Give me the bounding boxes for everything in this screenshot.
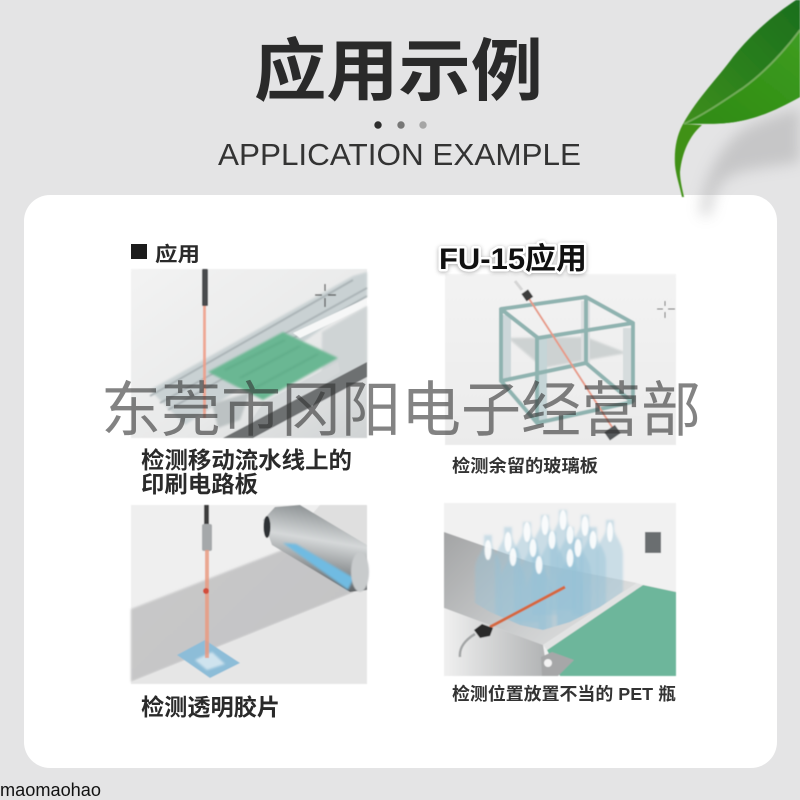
bottle highlights (484, 510, 613, 574)
sensor cable (460, 634, 475, 657)
caption: 检测移动流水线上的 (141, 447, 352, 473)
footer username: maomaohao (0, 780, 101, 800)
title: 应用示例 (254, 34, 543, 110)
heading: FU-15应用: FU-15应用 (439, 243, 587, 276)
caption: 检测透明胶片 (141, 694, 280, 720)
illustration: glass frame box (445, 274, 676, 445)
transparent film sheet (177, 640, 240, 678)
white content card (24, 195, 777, 768)
icon: green leaf (675, 0, 800, 197)
caption: 印刷电路板 (141, 471, 258, 497)
illustration: bottles on conveyor (444, 503, 676, 676)
bottles (475, 509, 624, 630)
crosshair cursor (315, 284, 336, 307)
leaf shadow (700, 108, 800, 215)
sensor receiver (604, 425, 621, 441)
sensor probe (202, 269, 208, 306)
sensor (474, 624, 493, 638)
decorative three dots (374, 121, 427, 129)
wall switch box (645, 532, 661, 553)
crosshair cursor (657, 301, 675, 318)
watermark: 东莞市冈阳电子经营部 (101, 377, 701, 444)
panel: misplaced PET bottle inspection (444, 503, 676, 704)
caption: 检测余留的玻璃板 (452, 456, 599, 476)
illustration: film on web (131, 505, 369, 684)
sensor emitter (515, 281, 522, 290)
panel: moving PCB inspection (131, 242, 367, 497)
heading: FU-15应用: FU-15应用 (439, 243, 587, 276)
subtitle: APPLICATION EXAMPLE (218, 137, 581, 172)
laser beam (526, 294, 612, 427)
sensor probe (204, 505, 209, 529)
panel: residual glass plate inspection (439, 243, 676, 476)
conveyor pulley (541, 652, 574, 676)
heading: 应用 (131, 242, 200, 266)
laser beam (203, 306, 206, 418)
heading: FU-15应用: FU-15应用 (439, 244, 587, 277)
panel: transparent film inspection (131, 505, 369, 720)
roller (263, 505, 367, 592)
caption: 检测位置放置不当的 PET 瓶 (452, 684, 676, 704)
heading: 应用: 应用 (155, 242, 200, 266)
laser beam (490, 587, 565, 627)
laser beam (205, 550, 209, 658)
caption (141, 447, 352, 497)
illustration: PCB on conveyor (131, 269, 367, 438)
